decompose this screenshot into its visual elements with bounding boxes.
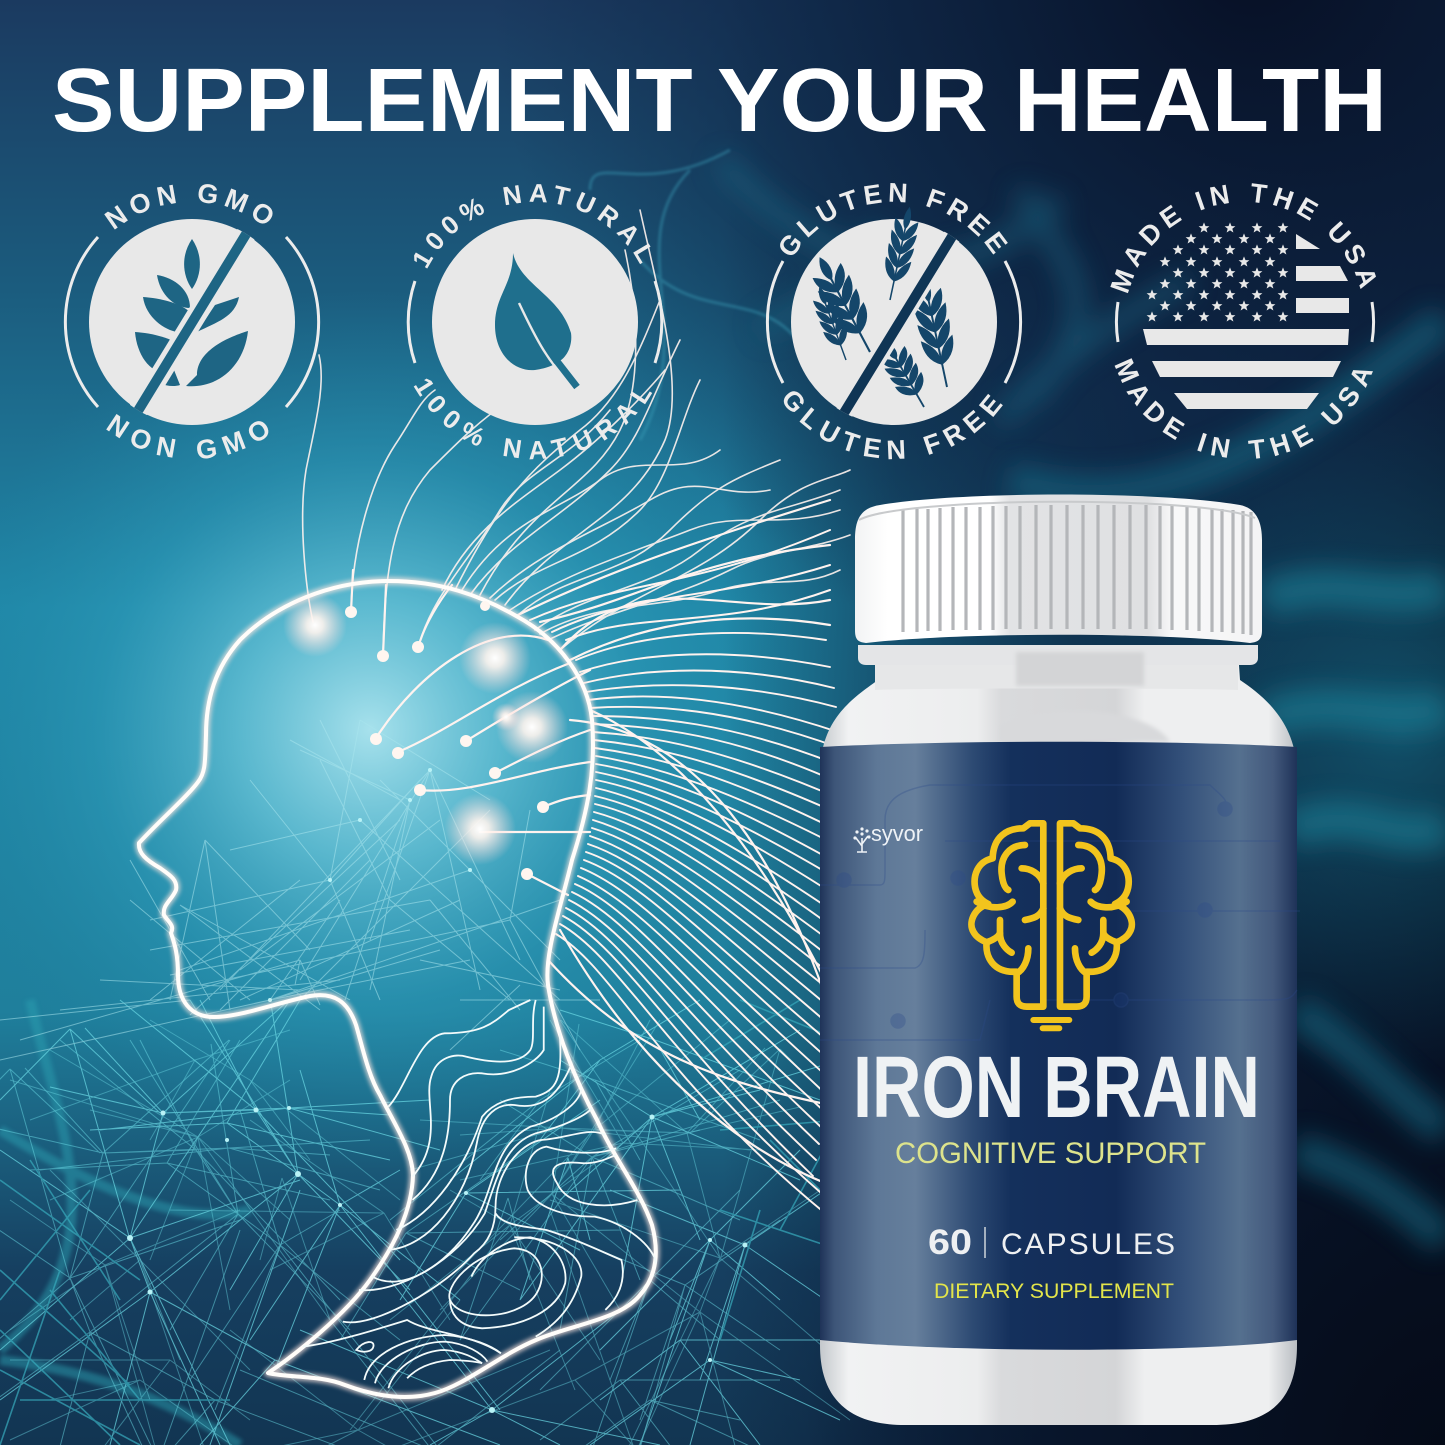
neck ring [858, 645, 1258, 665]
curved text: 100% NATURAL: 100% NATURAL [414, 184, 650, 268]
curved text: 100% NATURAL bottom: 100% NATURAL [414, 378, 652, 460]
icon: slash [836, 230, 956, 426]
curved text: NON GMO: NON GMO [104, 184, 273, 230]
cap [855, 494, 1262, 643]
curved text: GLUTEN FREE: GLUTEN FREE [780, 183, 1008, 255]
flowing lines from the head [303, 210, 850, 1214]
product name: IRON BRAIN [853, 1039, 1260, 1136]
side arcs [767, 261, 1021, 383]
side arcs [1116, 302, 1374, 342]
capsule count [928, 1223, 1175, 1262]
side arcs [65, 237, 319, 407]
icon: wheat stalks [805, 205, 962, 414]
light nodes inside the head [283, 593, 568, 880]
capsule count: CAPSULES [1001, 1228, 1175, 1261]
bottle [820, 494, 1300, 1425]
curved text: NON GMO bottom: NON GMO [106, 414, 268, 458]
dietary supplement: DIETARY SUPPLEMENT [934, 1280, 1174, 1303]
badge: made in the USA [1110, 183, 1376, 459]
bottle body [820, 650, 1297, 1425]
logo: syvor [853, 821, 923, 852]
network mesh background [0, 720, 850, 1445]
icon: flag stars [1147, 222, 1288, 322]
brand name: syvor [871, 821, 923, 846]
label circuit traces [820, 785, 1300, 1040]
title: SUPPLEMENT YOUR HEALTH [52, 51, 1387, 151]
icon: flag stripes [1143, 234, 1349, 409]
badge: 100% natural [406, 184, 664, 460]
badge: non GMO [64, 184, 320, 458]
icon: leaf [495, 253, 571, 370]
label [820, 742, 1297, 1350]
neck contour lines [303, 1000, 656, 1388]
icon: wheat leaves [135, 239, 248, 386]
strands rising from the crown [303, 210, 850, 655]
network nodes [127, 768, 748, 1413]
strands inside the head [351, 570, 590, 895]
badge: gluten free [766, 183, 1022, 460]
curved text: GLUTEN FREE bottom: GLUTEN FREE [784, 391, 1003, 460]
icon: brain bulb [971, 823, 1132, 1028]
icon: slash [133, 226, 251, 419]
head outline [139, 581, 656, 1397]
subtitle: COGNITIVE SUPPORT [895, 1137, 1206, 1170]
curved text: MADE IN THE USA bottom: MADE IN THE USA [1114, 358, 1373, 459]
icon: tree [856, 836, 868, 852]
fan of lines: back of head [518, 500, 846, 1214]
side arcs [408, 281, 662, 363]
curved text: MADE IN THE USA: MADE IN THE USA [1110, 183, 1376, 294]
capsule count: 60 [928, 1223, 972, 1262]
